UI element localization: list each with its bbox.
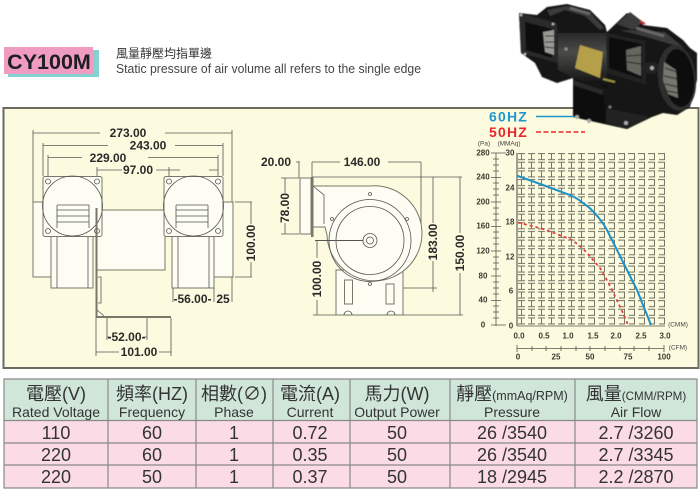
performance chart: (CMM) — [668, 322, 688, 328]
performance chart: 1.5 — [587, 332, 599, 340]
table header: 風量(CMM/RPM) — [586, 384, 686, 404]
performance chart: 100 — [657, 352, 671, 362]
side view drawing with dimensions: 20.00 — [261, 155, 291, 169]
subtitle text: Static pressure of air volume all refers to the single edge — [116, 62, 421, 76]
table row 1 — [42, 423, 674, 443]
performance chart: 12 — [506, 252, 515, 262]
table header — [12, 384, 686, 420]
front view drawing with dimensions: 101.00 — [121, 345, 158, 359]
model badge: CY100M: CY100M — [7, 50, 91, 74]
curve: 50Hz — [518, 222, 628, 325]
legend: 60HZ / 50HZ — [489, 108, 585, 140]
table header: Frequency — [119, 404, 185, 420]
performance chart: 80 — [479, 272, 488, 280]
performance chart: 50 — [586, 352, 595, 362]
subtitle text — [116, 46, 421, 76]
table row 2 — [41, 445, 674, 465]
table row 3: 50 — [142, 467, 162, 487]
front view drawing with dimensions: -56.00- — [173, 292, 212, 306]
front view drawing with dimensions: 229.00 — [90, 151, 127, 165]
table row 3: 1 — [229, 467, 239, 487]
performance chart: 18 — [506, 218, 515, 226]
table row 2: 26 /3540 — [477, 445, 547, 465]
performance chart: 2.5 — [635, 332, 647, 340]
front view drawing with dimensions: -52.00- — [107, 330, 146, 344]
performance chart: 0.5 — [538, 332, 550, 340]
performance chart: 40 — [479, 296, 488, 304]
table header: 頻率(HZ) — [116, 384, 188, 404]
performance chart: 0 — [509, 322, 514, 330]
side view drawing with dimensions: 78.00 — [278, 193, 292, 223]
specification table — [4, 379, 697, 488]
table header: Current — [287, 404, 333, 420]
performance chart: 0 — [481, 320, 486, 330]
performance chart: 160 — [476, 222, 490, 230]
performance chart: 2.0 — [610, 332, 622, 340]
table row 3: 2.2 /2870 — [598, 467, 674, 487]
side view drawing with dimensions: 183.00 — [426, 223, 440, 260]
table row 2: 1 — [229, 445, 239, 465]
performance chart: 0.0 — [513, 332, 525, 340]
side view drawing with dimensions — [261, 155, 467, 315]
performance chart: 75 — [624, 352, 633, 362]
curve: 60Hz — [517, 176, 651, 325]
side view drawing with dimensions: 146.00 — [344, 155, 381, 169]
performance chart: (MMAq) — [497, 140, 521, 148]
performance chart: 6 — [509, 286, 514, 296]
front view drawing with dimensions: 273.00 — [110, 126, 147, 140]
performance chart: 240 — [476, 172, 490, 182]
table row 1: 60 — [142, 423, 162, 443]
performance chart: (CFM) — [669, 344, 687, 352]
performance chart: 30 — [506, 148, 515, 158]
table row 3 — [41, 467, 674, 487]
table row 3: 220 — [41, 467, 71, 487]
table row 1: 50 — [387, 423, 407, 443]
table row 2: 220 — [41, 445, 71, 465]
table row 2: 50 — [387, 445, 407, 465]
performance chart: 120 — [476, 246, 490, 256]
table header: 馬力(W) — [365, 384, 429, 404]
table header: Output Power — [354, 404, 440, 420]
table header: Pressure — [484, 404, 540, 420]
table row 2: 0.35 — [292, 445, 328, 465]
front view drawing with dimensions: 243.00 — [130, 138, 167, 152]
table header: Air Flow — [611, 404, 662, 420]
performance chart: 24 — [506, 184, 515, 192]
side view drawing with dimensions: 150.00 — [453, 234, 467, 271]
table header: 電流(A) — [280, 384, 340, 404]
table row 2: 2.7 /3345 — [598, 445, 674, 465]
table row 3: 0.37 — [292, 467, 328, 487]
table row 1: 2.7 /3260 — [598, 423, 674, 443]
performance chart: 25 — [552, 352, 561, 362]
legend: 60HZ / 50HZ: 50HZ — [489, 124, 528, 140]
table row 1: 1 — [229, 423, 239, 443]
performance chart: 200 — [476, 198, 490, 206]
performance chart: 0 — [516, 352, 521, 362]
table row 1: 26 /3540 — [477, 423, 547, 443]
front view drawing with dimensions: 97.00 — [123, 163, 153, 177]
product photo: twin blower fan — [519, 4, 699, 129]
table row 2: 60 — [142, 445, 162, 465]
performance chart: (Pa) — [478, 140, 490, 148]
table header: 靜壓(mmAq/RPM) — [456, 384, 568, 404]
front view drawing with dimensions: 25 — [216, 292, 230, 306]
table row 1: 110 — [42, 423, 70, 443]
performance chart: 3.0 — [659, 332, 671, 340]
subtitle text: 風量靜壓均指單邊 — [116, 46, 212, 60]
table header: 相數(∅) — [201, 384, 267, 404]
table row 1: 0.72 — [292, 423, 328, 443]
performance chart — [476, 140, 688, 362]
table row 3: 50 — [387, 467, 407, 487]
side view drawing with dimensions: 100.00 — [310, 260, 324, 297]
front view drawing with dimensions: 100.00 — [244, 224, 258, 261]
panel: drawings and chart background — [4, 108, 698, 368]
performance chart: 280 — [476, 148, 490, 158]
table header: Rated Voltage — [12, 404, 100, 420]
table header: 電壓(V) — [26, 384, 86, 404]
table header: Phase — [214, 404, 254, 420]
legend: 60HZ / 50HZ: 60HZ — [489, 108, 528, 124]
front view drawing with dimensions — [33, 126, 258, 359]
table row 3: 18 /2945 — [477, 467, 547, 487]
performance chart: 1.0 — [562, 332, 574, 340]
